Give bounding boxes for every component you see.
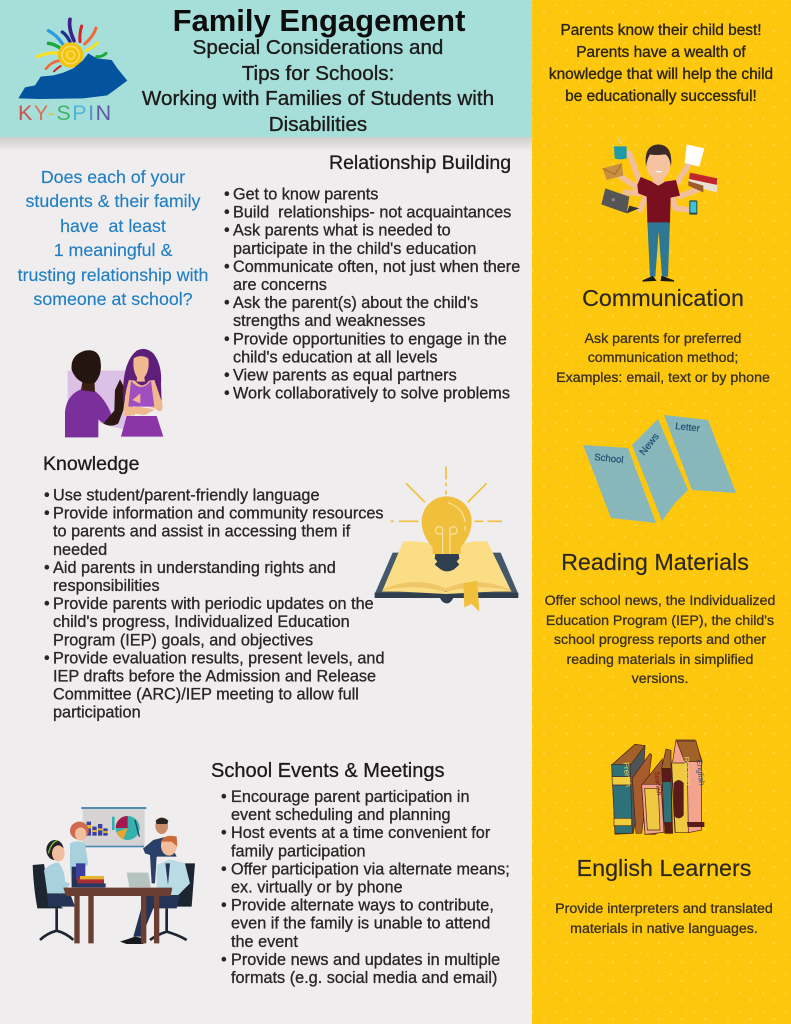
text: communication tip [556, 331, 770, 386]
list: knowledge tips: IEP drafts before the Admission and Release [53, 668, 376, 686]
text: parents know best: Parents know their child best! [560, 22, 762, 39]
callout: relationship question: students & their family [26, 191, 201, 211]
list: knowledge tips: needed [53, 541, 107, 559]
list: school events tips: • [221, 824, 227, 842]
list: school events tips: • [221, 860, 227, 878]
text: communication tip: Examples: email, text or by phone [556, 370, 770, 386]
list: school events tips [221, 788, 510, 987]
list: knowledge tips: Provide evaluation results, present levels, and [53, 649, 385, 667]
subtitle [142, 36, 494, 136]
text: communication tip: communication method; [588, 350, 738, 366]
list: relationship building tips: participate in the child's education [233, 240, 476, 258]
icon: school newsletter [583, 415, 736, 523]
icon: team meeting around a table [33, 807, 195, 944]
list: school events tips: Offer participation via alternate means; [231, 860, 510, 878]
list: relationship building tips: are concerns [233, 276, 327, 294]
list: knowledge tips: child's progress, Individualized Education [53, 613, 350, 631]
list: school events tips: Host events at a time convenient for [231, 824, 491, 842]
callout: relationship question: Does each of your [41, 167, 185, 187]
list: knowledge tips: Provide parents with periodic updates on the [53, 595, 374, 613]
list: relationship building tips: • [224, 222, 230, 240]
text: reading materials tip: Education Program (IEP), the child's [546, 613, 774, 629]
list: knowledge tips: • [44, 559, 50, 577]
list: relationship building tips: child's education at all levels [233, 348, 438, 366]
list: relationship building tips: • [224, 258, 230, 276]
heading: Knowledge: Knowledge [43, 453, 140, 475]
text: communication tip: Ask parents for preferred [585, 331, 741, 347]
list: relationship building tips: View parents as equal partners [233, 366, 457, 384]
icon: light bulb over open book [375, 467, 518, 612]
list: knowledge tips: • [44, 595, 50, 613]
heading: English Learners: English Learners [577, 855, 751, 881]
list: school events tips: Provide alternate ways to contribute, [231, 897, 494, 915]
callout: relationship question: 1 meaningful & [54, 240, 172, 260]
icon: school newsletter: School [594, 452, 624, 466]
list: school events tips: family participation [231, 842, 366, 860]
list: school events tips: even if the family is unable to attend [231, 915, 490, 933]
text: English learners tip: materials in native languages. [570, 921, 758, 937]
text: parents know best: knowledge that will help the child [549, 66, 773, 83]
subtitle: Tips for Schools: [242, 62, 394, 85]
icon: school newsletter: News [638, 431, 662, 458]
icon: stack of books [612, 740, 706, 834]
heading: School Events & Meetings: School Events & Meetings [211, 760, 444, 782]
list: relationship building tips: Ask the parent(s) about the child's [233, 294, 478, 312]
list: school events tips: Provide news and updates in multiple [231, 951, 500, 969]
callout: relationship question: have at least [60, 216, 166, 236]
list: knowledge tips: • [44, 505, 50, 523]
list: relationship building tips: • [224, 385, 230, 403]
list: relationship building tips: Communicate often, not just when there [233, 258, 520, 276]
text: reading materials tip: versions. [632, 671, 688, 687]
subtitle: Special Considerations and [193, 36, 443, 59]
panel: header band [0, 0, 532, 151]
icon: stack of books: French [621, 762, 633, 787]
list: knowledge tips: • [44, 486, 50, 504]
list: knowledge tips: to parents and assist in accessing them if [53, 523, 351, 541]
list: knowledge tips: Program (IEP) goals, and objectives [53, 631, 313, 649]
list: school events tips: • [221, 897, 227, 915]
icon: stack of books: Spanish [653, 771, 662, 796]
callout: relationship question: someone at school? [33, 289, 193, 309]
list: knowledge tips: Committee (ARC)/IEP meeting to allow full [53, 686, 359, 704]
list: knowledge tips [44, 486, 385, 722]
icon: school newsletter: Letter [675, 421, 701, 435]
text: parents know best: Parents have a wealth of [576, 44, 746, 61]
text: reading materials tip: school progress reports and other [554, 632, 766, 648]
list: relationship building tips: Provide opportunities to engage in the [233, 330, 507, 348]
heading: Relationship Building: Relationship Building [329, 152, 511, 174]
list: knowledge tips: participation [53, 704, 141, 722]
callout: relationship question: trusting relationship with [18, 265, 208, 285]
list: school events tips: ex. virtually or by phone [231, 878, 403, 896]
list: knowledge tips: Use student/parent-friendly language [53, 486, 320, 504]
panel: right yellow column [532, 0, 791, 1024]
list: relationship building tips: Work collaboratively to solve problems [233, 385, 510, 403]
list: knowledge tips: Provide information and community resources [53, 505, 384, 523]
list: school events tips: formats (e.g. social media and email) [231, 969, 497, 987]
list: school events tips: • [221, 951, 227, 969]
heading: Communication: Communication [582, 285, 744, 311]
list: relationship building tips: • [224, 366, 230, 384]
list: relationship building tips [224, 186, 520, 403]
list: school events tips: event scheduling and planning [231, 806, 451, 824]
list: relationship building tips: • [224, 186, 230, 204]
icon: two people signing [65, 349, 163, 437]
list: school events tips: • [221, 788, 227, 806]
list: relationship building tips: Get to know parents [233, 186, 378, 204]
title: Family Engagement [173, 3, 465, 38]
text: English learners tip: Provide interpreters and translated [555, 901, 773, 917]
icon: stack of books: English [695, 759, 706, 786]
list: relationship building tips: • [224, 330, 230, 348]
list: knowledge tips: Aid parents in understanding rights and [53, 559, 336, 577]
icon: stack of books: Russian [681, 756, 693, 786]
list: relationship building tips: • [224, 204, 230, 222]
list: relationship building tips: • [224, 294, 230, 312]
callout: relationship question [18, 167, 208, 309]
icon: KY-SPIN logo [18, 19, 127, 125]
subtitle: Working with Families of Students with [142, 87, 494, 110]
text: reading materials tip [545, 593, 775, 687]
text: reading materials tip: reading materials in simplified [567, 652, 753, 668]
list: school events tips: Encourage parent participation in [231, 788, 470, 806]
list: relationship building tips: strengths and weaknesses [233, 312, 425, 330]
list: school events tips: the event [231, 933, 298, 951]
subtitle: Disabilities [269, 113, 367, 136]
text: English learners tip [555, 901, 773, 937]
list: relationship building tips: Build relationships- not acquaintances [233, 204, 511, 222]
heading: Reading Materials: Reading Materials [561, 549, 749, 575]
list: knowledge tips: • [44, 649, 50, 667]
list: knowledge tips: responsibilities [53, 577, 160, 595]
icon: KY-SPIN logo: KY-SPIN [18, 101, 113, 125]
list: relationship building tips: Ask parents what is needed to [233, 222, 451, 240]
text: parents know best [549, 22, 773, 105]
text: parents know best: be educationally successful! [565, 88, 757, 105]
icon: multitasking person [601, 138, 717, 281]
text: reading materials tip: Offer school news, the Individualized [545, 593, 775, 609]
